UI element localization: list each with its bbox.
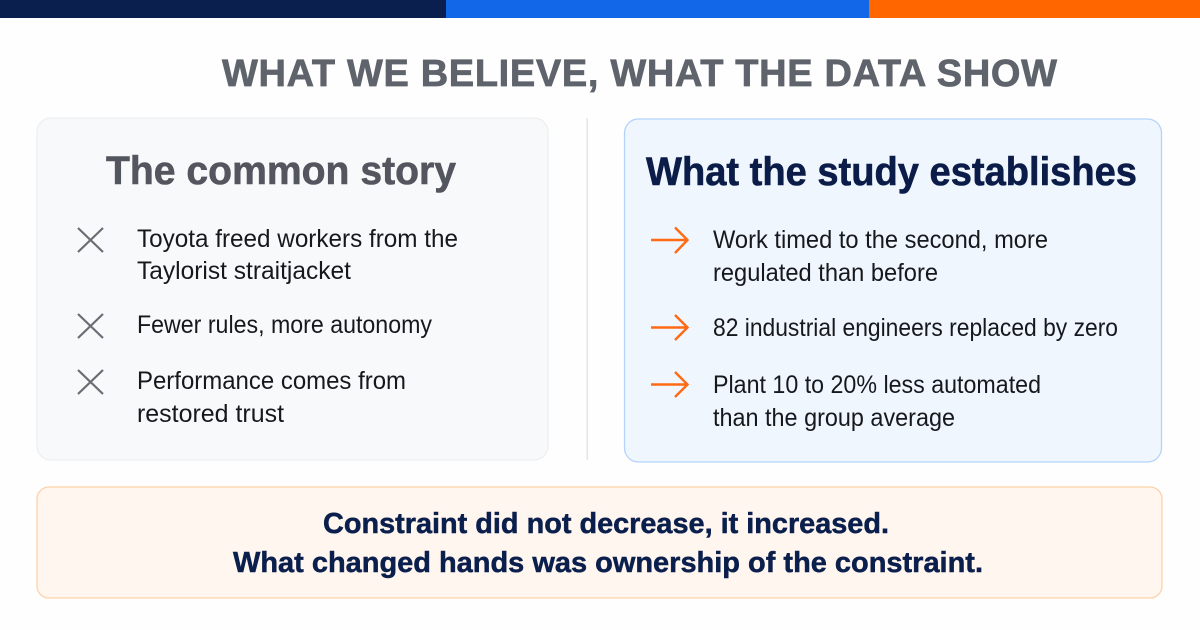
icon: cross [78, 228, 103, 252]
icon: cross [78, 370, 103, 394]
callout [37, 487, 1162, 598]
item text: Plant 10 to 20% less automated [713, 371, 1041, 399]
item: plant automation [651, 371, 1041, 432]
item text: 82 industrial engineers replaced by zero [713, 314, 1118, 342]
callout text: What changed hands was ownership of the constraint. [233, 547, 983, 579]
panel: what the study establishes [624, 119, 1162, 462]
heading: the common story: The common story [106, 149, 457, 193]
item text: Performance comes from [137, 367, 406, 395]
item text: Fewer rules, more autonomy [137, 311, 432, 339]
heading: what the study establishes: What the study establishes [646, 150, 1137, 194]
icon: cross [78, 314, 103, 338]
item text: restored trust [137, 400, 284, 428]
item: performance [78, 367, 406, 428]
icon: arrow [651, 372, 688, 397]
icon: arrow [651, 228, 688, 253]
callout text: Constraint did not decrease, it increased. [323, 508, 889, 540]
item: work timed [651, 226, 1048, 287]
item: fewer rules [78, 311, 432, 339]
item: industrial engineers [651, 314, 1118, 342]
item: Toyota freed workers [78, 225, 458, 285]
top colour bar [0, 0, 1200, 18]
centre divider [586, 118, 588, 460]
callout background [37, 487, 1162, 598]
item text: regulated than before [713, 259, 938, 287]
panel background [37, 118, 548, 460]
title: WHAT WE BELIEVE, WHAT THE DATA SHOW [222, 53, 1057, 95]
panel background [624, 119, 1162, 462]
icon: arrow [651, 315, 688, 340]
item text: Toyota freed workers from the [137, 225, 458, 253]
item text: Work timed to the second, more [713, 226, 1048, 254]
panel: the common story [37, 118, 548, 460]
item text: Taylorist straitjacket [137, 257, 351, 285]
item text: than the group average [713, 404, 955, 432]
